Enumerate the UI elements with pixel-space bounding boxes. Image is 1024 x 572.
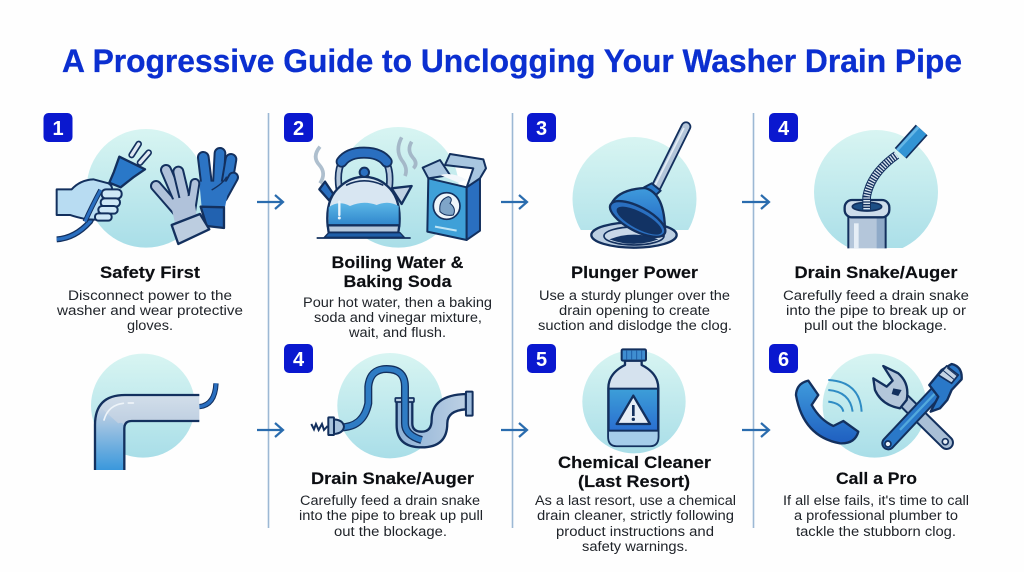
badge 2 (284, 113, 313, 142)
panel: step 5 chemical cleaner (527, 344, 736, 554)
heading: Drain Snake/Auger (311, 469, 474, 488)
icon: kettle and baking soda box (316, 127, 486, 248)
arrow: lower row second (501, 423, 527, 437)
body text: drain opening to create (559, 303, 710, 318)
badge 5: 5 (536, 349, 547, 371)
body text: washer and wear protective (56, 303, 243, 318)
badge 4: 4 (778, 118, 790, 140)
heading: Baking Soda (344, 272, 452, 291)
heading: Drain Snake/Auger (794, 263, 958, 282)
body text (535, 493, 736, 554)
body text: safety warnings. (582, 539, 688, 554)
heading: Chemical Cleaner (558, 453, 711, 472)
heading: Boiling Water & (332, 253, 464, 272)
body text: into the pipe to break up pull (299, 508, 483, 523)
badge 5 (527, 344, 556, 373)
badge 2: 2 (293, 118, 304, 140)
heading: (Last Resort) (578, 472, 690, 491)
body text: Disconnect power to the (68, 288, 232, 303)
arrow: step 2 to 3 (501, 195, 527, 209)
badge 3: 3 (536, 118, 547, 140)
body text: gloves. (127, 318, 173, 333)
icon: hand with plug and gloves (57, 129, 233, 248)
badge 4 (769, 113, 798, 142)
body text (303, 295, 492, 340)
body text: As a last resort, use a chemical (535, 493, 736, 508)
badge 6 (769, 344, 798, 373)
body text: product instructions and (556, 524, 714, 539)
panel: step 4 drain snake upper (769, 113, 969, 333)
body text: a professional plumber to (794, 508, 958, 523)
heading: Safety First (100, 263, 200, 282)
panel: step 1 safety first (44, 113, 243, 333)
body text: suction and dislodge the clog. (538, 318, 732, 333)
arrow: step 3 to 4 (742, 195, 769, 209)
heading: Call a Pro (836, 469, 917, 488)
heading: Plunger Power (571, 263, 698, 282)
icon: snake through P-trap (311, 353, 473, 458)
icon: chemical bottle with warning (582, 349, 686, 453)
title: A Progressive Guide to Unclogging Your Washer Drain Pipe (62, 43, 962, 79)
badge 1: 1 (52, 118, 64, 140)
badge 4 lower (284, 344, 313, 373)
icon: phone and crossed wrenches (796, 354, 962, 458)
divider lines (268, 113, 754, 528)
icon: washer drain pipe elbow (91, 354, 216, 470)
body text: wait, and flush. (348, 325, 446, 340)
body text (783, 288, 969, 333)
body text: out the blockage. (334, 524, 447, 539)
body text: Carefully feed a drain snake (783, 288, 969, 303)
panel: step 2 boiling water (284, 113, 492, 340)
icon: plunger over drain (572, 127, 696, 261)
body text: Pour hot water, then a baking (303, 295, 492, 310)
panel: step 6 call a pro (769, 344, 969, 539)
body text (299, 493, 483, 539)
heading (332, 253, 464, 291)
body text: drain cleaner, strictly following (537, 508, 734, 523)
arrow: lower row first (257, 423, 283, 437)
badge 1 (44, 113, 72, 142)
arrow: step 1 to 2 (257, 195, 283, 209)
panel: lower step 4 drain snake (284, 344, 483, 539)
body text: Carefully feed a drain snake (300, 493, 480, 508)
badge 3 (527, 113, 556, 142)
heading (558, 453, 711, 491)
badge 6: 6 (778, 349, 789, 371)
body text: into the pipe to break up or (786, 303, 967, 318)
body text: Use a sturdy plunger over the (539, 288, 730, 303)
body text: If all else fails, it's time to call (783, 493, 969, 508)
body text: pull out the blockage. (804, 318, 947, 333)
arrow: lower row third (742, 423, 769, 437)
body text (783, 493, 969, 539)
icon: auger entering pipe (814, 127, 938, 254)
badge 4 lower: 4 (293, 349, 305, 371)
body text: soda and vinegar mixture, (314, 310, 482, 325)
panel: step 3 plunger power (527, 113, 732, 333)
body text (538, 288, 732, 333)
body text (56, 288, 243, 333)
body text: tackle the stubborn clog. (796, 524, 956, 539)
